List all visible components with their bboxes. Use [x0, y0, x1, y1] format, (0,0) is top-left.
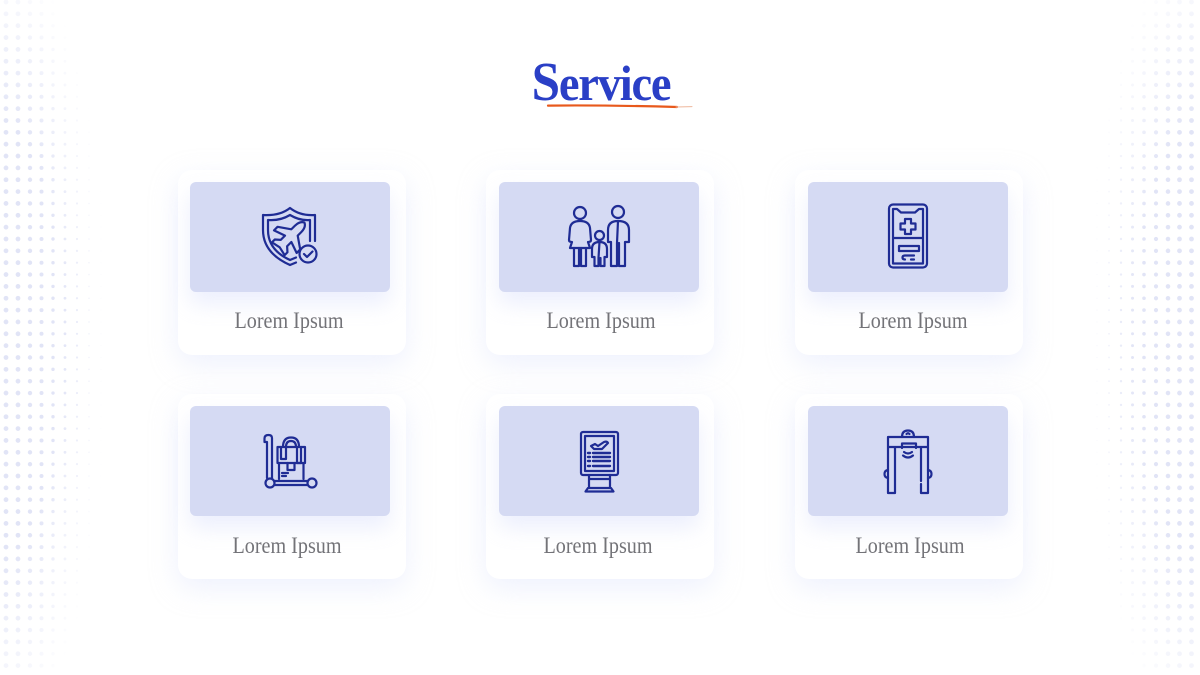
- label: Lorem Ipsum: [234, 308, 343, 333]
- icon: family of three: [568, 204, 630, 268]
- icon: shield with plane: [262, 206, 318, 266]
- icon panel: [499, 406, 699, 516]
- icon panel: [808, 182, 1008, 292]
- label: Lorem Ipsum: [856, 533, 964, 558]
- icon: phone with medical cross: [888, 203, 928, 269]
- card: luggage trolley: [178, 394, 406, 579]
- icon: luggage on trolley: [263, 434, 318, 489]
- card: flight info kiosk: [486, 394, 714, 579]
- label: Lorem Ipsum: [233, 533, 341, 558]
- title: Service: [532, 51, 670, 112]
- label: Lorem Ipsum: [544, 533, 652, 558]
- label: Lorem Ipsum: [547, 308, 655, 333]
- icon panel: [190, 182, 390, 292]
- card: security gate: [795, 394, 1023, 579]
- icon panel: [499, 182, 699, 292]
- icon panel: [190, 406, 390, 516]
- card: medical phone: [795, 170, 1023, 355]
- card: family: [486, 170, 714, 355]
- icon panel: [808, 406, 1008, 516]
- icon: airport information kiosk: [580, 430, 620, 493]
- label: Lorem Ipsum: [859, 308, 967, 333]
- card: insurance shield: [178, 170, 406, 355]
- title underline brush stroke: [546, 104, 692, 108]
- icon: security scanner gate: [883, 429, 933, 494]
